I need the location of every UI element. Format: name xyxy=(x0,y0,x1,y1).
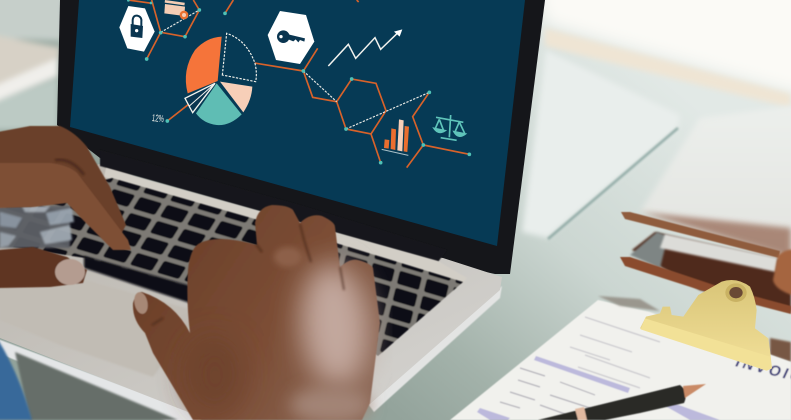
lower wallet strip xyxy=(620,257,791,314)
keyboard keys left xyxy=(0,178,300,300)
thumbnail right xyxy=(132,291,150,315)
lower finger xyxy=(0,163,131,250)
wallet lower interior xyxy=(632,232,791,312)
hinge shadow xyxy=(100,150,447,262)
icon: scales xyxy=(434,115,465,140)
shadow on thumb side xyxy=(185,335,245,415)
keyboard top trim xyxy=(104,168,467,283)
blurred document on table xyxy=(522,50,680,239)
trackpad xyxy=(0,280,200,377)
wallet brown fade xyxy=(640,212,791,258)
laptop front lip xyxy=(0,338,205,420)
blurred background top left xyxy=(0,0,64,130)
screen graphics xyxy=(119,0,471,168)
phone in wallet xyxy=(630,232,668,268)
network lines xyxy=(128,0,469,168)
clipboard edge right xyxy=(770,338,791,362)
pie chart xyxy=(185,33,256,125)
percentage label: 12% xyxy=(151,113,165,125)
bright background wall xyxy=(530,0,791,100)
thumbnail xyxy=(55,259,85,285)
knuckle highlight xyxy=(274,247,302,267)
invoice table text xyxy=(500,368,595,414)
table under laptop xyxy=(15,352,178,420)
laptop right lip xyxy=(368,286,502,412)
screen xyxy=(70,0,525,246)
icon: key hexagon xyxy=(268,11,314,64)
knuckle shading xyxy=(55,160,84,175)
upper finger xyxy=(0,126,126,240)
network nodes xyxy=(127,0,471,164)
peach horizon band xyxy=(545,28,791,108)
invoice lines xyxy=(570,317,660,388)
dashed connectors xyxy=(161,10,429,129)
white cards xyxy=(660,234,778,272)
keyboard deck xyxy=(0,163,502,414)
blue sleeve xyxy=(0,335,32,420)
leather wallet xyxy=(620,105,791,314)
icon: lock hexagon xyxy=(119,6,155,52)
finger creases xyxy=(152,224,344,325)
left hand xyxy=(0,126,131,288)
laptop lid xyxy=(57,0,545,274)
invoice table header xyxy=(534,356,630,393)
space bar band xyxy=(84,256,205,308)
light on back of hand xyxy=(296,260,374,390)
keyboard keys right xyxy=(300,232,463,356)
hand body xyxy=(133,205,380,420)
document icon xyxy=(164,0,188,19)
pen tip xyxy=(683,384,706,398)
wallet strap xyxy=(773,250,791,296)
clipboard shadow xyxy=(598,296,660,311)
thumb xyxy=(0,247,87,288)
gold clip xyxy=(640,280,772,371)
right hand xyxy=(132,205,380,420)
trend arrow xyxy=(328,29,402,66)
blurred gray left keys xyxy=(0,206,74,248)
top wallet strip xyxy=(621,212,780,258)
icon: bar chart xyxy=(382,119,409,155)
wallet top pages xyxy=(640,105,791,258)
pen band xyxy=(575,407,587,420)
pen xyxy=(538,384,706,420)
lower wrist tint xyxy=(290,387,370,420)
invoice paper xyxy=(450,300,791,420)
